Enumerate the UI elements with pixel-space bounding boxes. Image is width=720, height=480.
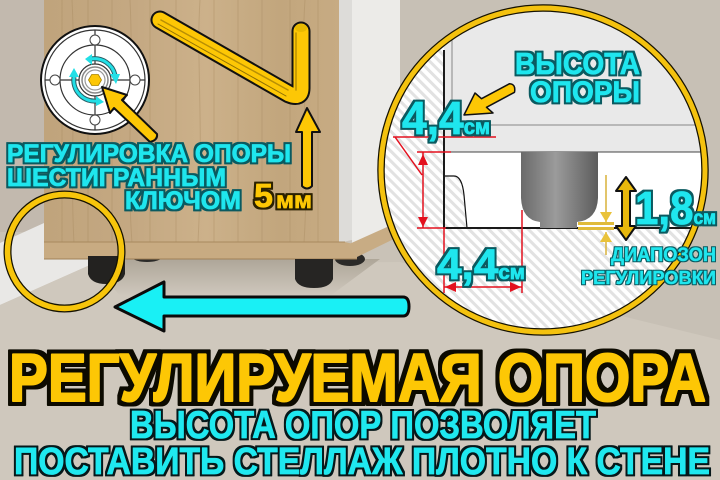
wrench caption: РЕГУЛИРОВКА ОПОРЫ: [7, 140, 291, 168]
wrench caption: КЛЮЧОМ: [125, 187, 241, 215]
yellow arrow to height label: [464, 84, 515, 115]
cyan arrow pointing left: [115, 282, 409, 331]
yellow arrow to hex socket: [102, 87, 157, 142]
5 mm label: [254, 177, 312, 214]
dimension 4,4 cm height: 4,4см: [402, 92, 490, 144]
red dimension lines: [393, 137, 522, 293]
wrench caption: [7, 140, 291, 215]
back feet: [132, 252, 365, 266]
support height caption: ОПОРЫ: [530, 76, 640, 109]
small callout circle: [8, 194, 122, 308]
subtitle: [14, 404, 710, 480]
magnified section circle: [378, 5, 709, 335]
yellow up arrow: [296, 108, 320, 188]
dimension 1,8 cm: 1,8см: [635, 182, 716, 234]
5 mm label: 5: [254, 177, 273, 214]
front feet: [88, 256, 333, 288]
wrench caption: ШЕСТИГРАННЫМ: [7, 164, 226, 192]
adjustable foot section: [521, 152, 598, 228]
adjustment range caption: ДИАПОЗОН: [611, 245, 716, 266]
support height caption: ВЫСОТА: [515, 46, 640, 81]
hex key: [158, 20, 307, 96]
support height caption: [515, 46, 640, 109]
dimension 4,4 cm width: 4,4см: [437, 241, 525, 289]
shelf unit wood panel: [44, 0, 398, 259]
subtitle: ВЫСОТА ОПОР ПОЗВОЛЯЕТ: [130, 404, 596, 447]
adjustment disc icon: [41, 26, 149, 134]
adjustment range caption: РЕГУЛИРОВКИ: [581, 268, 716, 288]
adjustment range caption: [581, 245, 716, 288]
5 mm label: мм: [276, 187, 312, 213]
small callout circle fill ring: [8, 194, 122, 308]
yellow range markers: [578, 175, 636, 255]
